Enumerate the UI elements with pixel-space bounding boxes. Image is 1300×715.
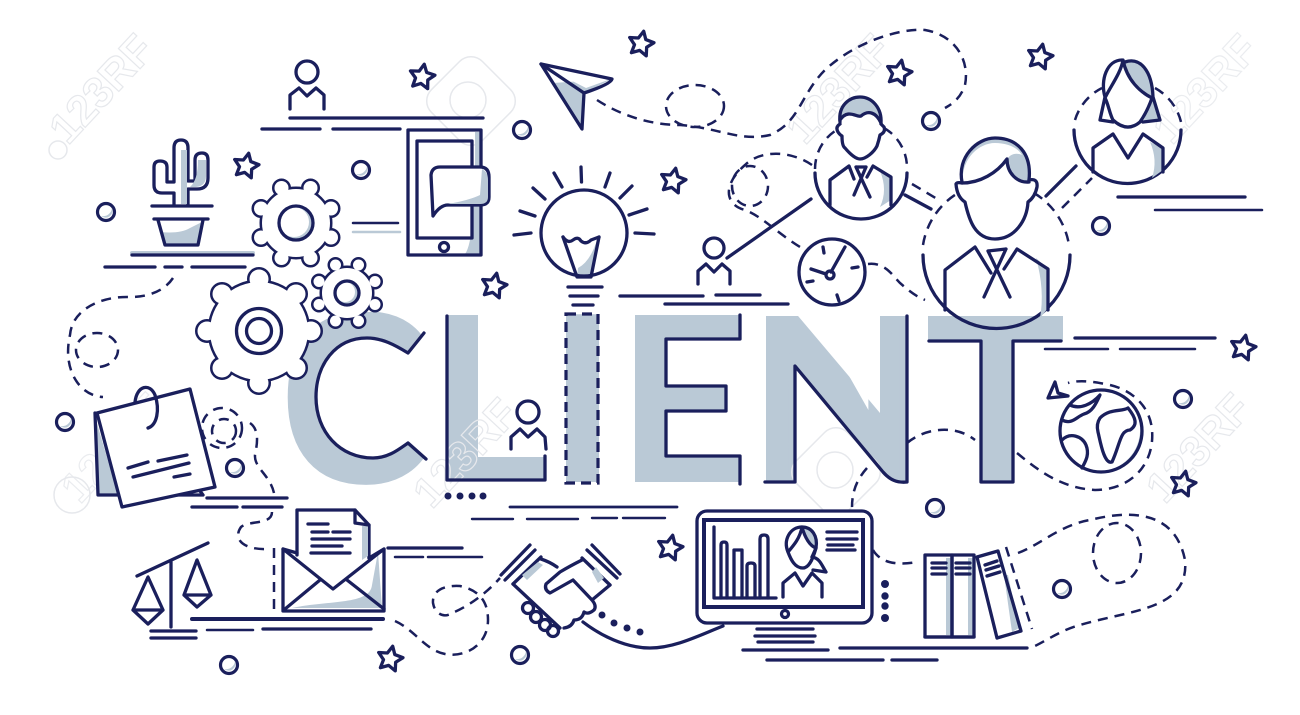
icon: globe (1060, 390, 1142, 472)
letter outlines (316, 314, 1061, 484)
icon: person on L (511, 401, 546, 449)
lines around envelope (192, 548, 482, 630)
lines under cactus (105, 253, 253, 267)
lines under note (192, 498, 287, 507)
connector: person to man (727, 199, 811, 258)
dashed loop (666, 85, 724, 127)
icon: person middle (698, 238, 730, 284)
dashed arc from N (852, 430, 975, 507)
letter N: N (750, 262, 923, 532)
letter E: E (622, 263, 755, 532)
watermarks: 123RF (777, 26, 900, 153)
dashed circles by note (202, 408, 274, 493)
watermarks (40, 26, 1267, 523)
connectors between avatars (905, 166, 1092, 209)
gear large (198, 270, 320, 392)
icon: man avatar small (815, 97, 907, 219)
watermarks: 123RF (52, 385, 175, 512)
dashed line by books (1006, 547, 1032, 629)
small circles (56, 112, 1192, 674)
monitor stand lines (743, 629, 1027, 660)
letter T: T (923, 262, 1068, 532)
icon: note paper (95, 387, 215, 507)
letter I: I (550, 263, 616, 533)
cable and dots (583, 612, 723, 648)
icon: man avatar large (923, 138, 1070, 329)
watermarks: 123RF (1144, 26, 1267, 153)
icon: envelope (283, 510, 384, 611)
icon: handshake (501, 545, 620, 636)
icon: clock (799, 239, 865, 305)
letter C: C (280, 263, 440, 533)
watermarks: 123RF (1137, 385, 1260, 512)
dashed path from plane (597, 30, 966, 137)
bar chart (714, 527, 776, 598)
icon: woman avatar (1074, 60, 1181, 183)
lines under person (620, 295, 788, 304)
watermarks: 123RF (404, 390, 527, 517)
dashed vertical by envelope (273, 548, 275, 613)
lines right (1045, 197, 1262, 349)
icon: gears (198, 181, 380, 392)
gear small (314, 260, 380, 326)
lines near phone (262, 118, 483, 232)
stars (232, 29, 1258, 672)
dashed from monitor (873, 550, 917, 564)
bulb stand lines (568, 287, 602, 305)
monitor dots (881, 580, 889, 622)
dashed loop left of man (729, 154, 812, 247)
icon: light bulb (514, 167, 654, 277)
icon: monitor (697, 511, 872, 623)
lines above handshake (472, 507, 677, 519)
icon: phone with speech bubble (408, 130, 489, 255)
icon: scales (133, 543, 211, 638)
dashed left (68, 278, 173, 397)
title: CLIENT (288, 312, 1063, 485)
letter counters (316, 300, 1073, 491)
dashed loop by envelope (238, 512, 272, 549)
dashed orbit around globe (1017, 381, 1152, 490)
icon: small plane by globe (1048, 382, 1068, 398)
dashed line from clock (868, 264, 925, 300)
watermarks: 123RF (40, 26, 163, 153)
icon: cactus (152, 140, 212, 245)
icon: books (925, 551, 1021, 638)
presenter (783, 527, 826, 597)
dots under L (444, 492, 486, 500)
dashed loop right (1018, 515, 1185, 648)
dashed loop by handshake (395, 578, 500, 655)
icon: person top left (290, 61, 324, 109)
icon: paper plane (541, 64, 612, 129)
letter L: L (434, 264, 559, 533)
gear top (254, 181, 338, 265)
